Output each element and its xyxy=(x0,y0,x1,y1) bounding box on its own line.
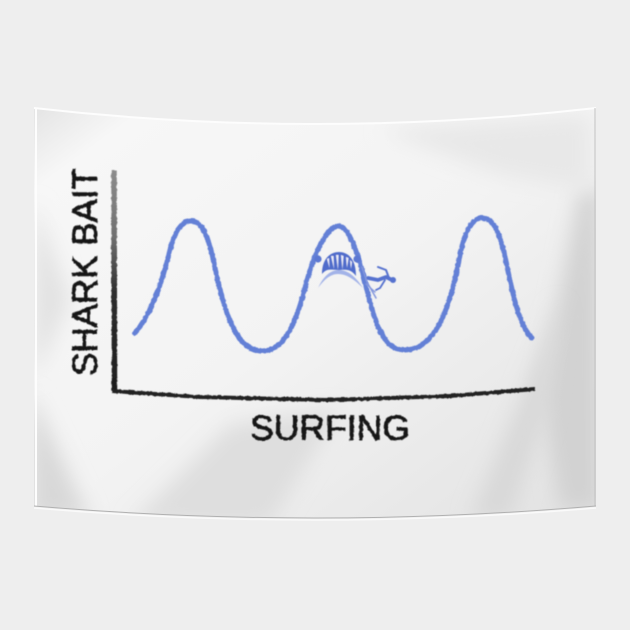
tapestry illustration xyxy=(34,107,596,520)
shark lower jaw xyxy=(318,270,363,288)
icon: surfer xyxy=(362,267,396,298)
shark eyes xyxy=(314,255,361,263)
shark mouth and teeth xyxy=(322,252,356,276)
y axis label: SHARK BAIT xyxy=(66,168,105,376)
tapestry cloth xyxy=(30,108,600,525)
x axis label: SURFING xyxy=(250,409,410,448)
icon: shark xyxy=(314,252,363,288)
chart axes xyxy=(112,170,535,400)
wave curve xyxy=(135,218,532,351)
